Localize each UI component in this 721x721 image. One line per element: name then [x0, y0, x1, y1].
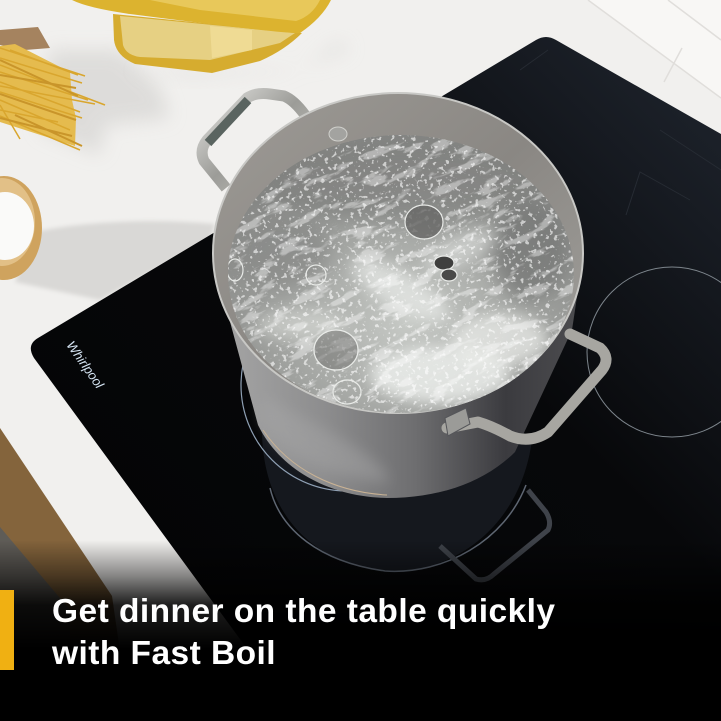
pot rim and inner wall	[213, 93, 583, 413]
sparkling bubbles	[225, 130, 580, 420]
spaghetti box	[0, 27, 50, 50]
wall droplet	[329, 127, 347, 141]
right pot handle	[447, 334, 606, 439]
main burner ring	[241, 279, 453, 491]
dark water patch	[492, 200, 568, 300]
boiling water	[228, 135, 574, 413]
title: Get dinner on the table quickly	[52, 593, 556, 630]
copper base line	[263, 430, 387, 495]
pot body	[216, 270, 578, 498]
yellow oven mitt upper	[72, 0, 331, 33]
handle rivet plate	[445, 408, 470, 436]
foam highlights	[255, 220, 548, 403]
bottom dark gradient	[0, 540, 721, 721]
title: with Fast Boil	[51, 635, 276, 672]
cooktop etched marks	[520, 50, 721, 215]
left handle dark reflection	[208, 100, 248, 143]
Whirlpool logo: Whirlpool	[64, 338, 108, 392]
yellow accent bar	[0, 590, 14, 670]
right burner ring	[587, 267, 721, 437]
wall tiles	[588, 0, 721, 98]
pot body highlight	[262, 395, 390, 482]
left pot handle	[202, 94, 305, 188]
swirl texture	[228, 136, 574, 413]
dark left patch	[250, 224, 332, 288]
spaghetti	[0, 44, 105, 150]
large bubbles	[227, 205, 457, 404]
shadows on counter	[15, 40, 350, 300]
pot reflection	[262, 430, 550, 580]
salt bowl	[0, 176, 42, 280]
wood floor edge	[0, 428, 130, 721]
darker upper water	[284, 158, 524, 224]
yellow oven mitt lower	[113, 14, 302, 73]
